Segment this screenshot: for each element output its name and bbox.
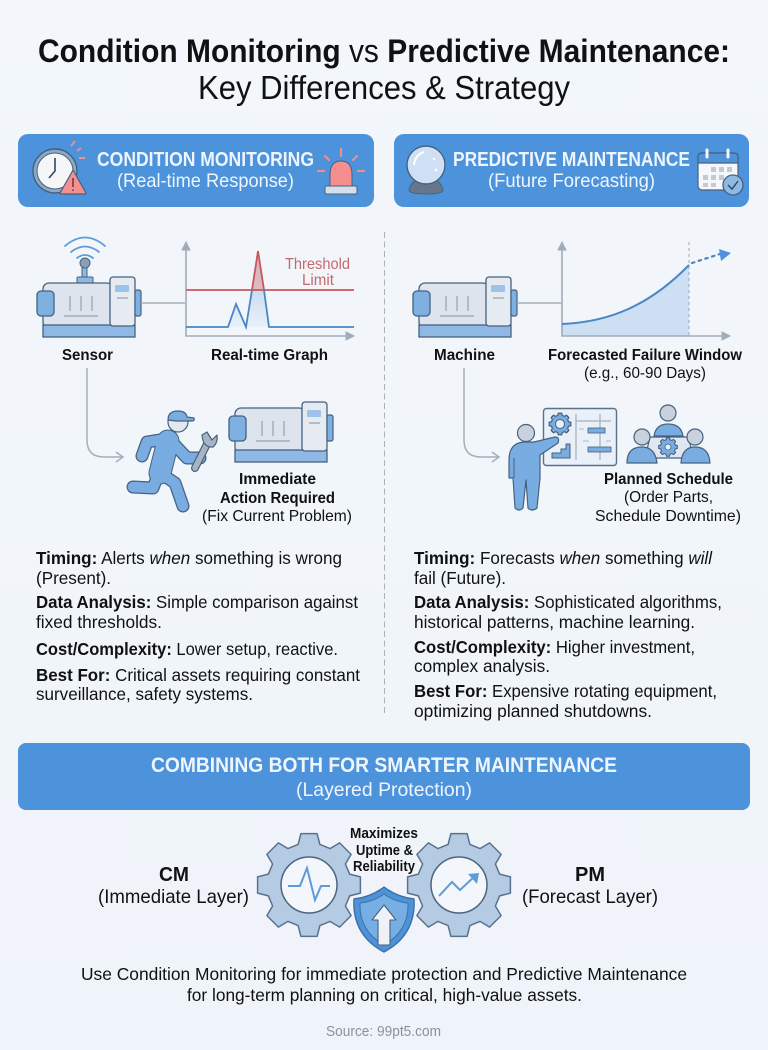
icon: machine — [413, 277, 517, 337]
heading: condition monitoring: CONDITION MONITORING — [97, 149, 314, 171]
text block: predictive maintenance details: fail (Future). — [414, 568, 506, 588]
divider — [384, 232, 386, 715]
icon: shield with arrow — [354, 887, 414, 952]
icon: planning board — [544, 408, 616, 466]
subheading: real-time response: (Real-time Response) — [117, 170, 294, 192]
text block: condition monitoring details: Cost/Complexity: Lower setup, reactive. — [36, 639, 338, 659]
icon: clock with warning — [33, 141, 86, 194]
label: machine: Machine — [434, 347, 495, 364]
connector — [141, 302, 185, 304]
label: forecasted failure window: (e.g., 60-90 Days) — [584, 365, 706, 382]
label: forecasted failure window: Forecasted Failure Window — [548, 347, 743, 364]
text block: condition monitoring details: Best For: Critical assets requiring constant — [36, 665, 360, 685]
text: planned schedule — [595, 471, 741, 525]
panel: condition monitoring header — [18, 134, 374, 207]
text block: condition monitoring details — [36, 548, 360, 704]
label: forecasted failure window — [548, 347, 743, 382]
text block: predictive maintenance details: Data Analysis: Sophisticated algorithms, — [414, 592, 722, 612]
source: Source: 99pt5.com — [326, 1024, 441, 1040]
label: predictive maintenance layer: PM — [575, 864, 605, 886]
text: maximizes uptime and reliability — [350, 826, 418, 875]
chart: forecast curve — [558, 242, 731, 340]
text: immediate action required — [202, 471, 352, 525]
icon: team meeting — [627, 405, 710, 463]
text block: condition monitoring details: Timing: Alerts when something is wrong — [36, 548, 342, 568]
title: Key Differences & Strategy — [198, 69, 570, 106]
panel: predictive maintenance header — [394, 134, 749, 207]
icon: machine being repaired — [229, 402, 333, 462]
title — [38, 33, 730, 106]
connector — [517, 302, 562, 304]
text block: predictive maintenance details: Timing: Forecasts when something will — [414, 548, 713, 568]
text block: condition monitoring details: (Present). — [36, 568, 111, 588]
label: condition monitoring layer: (Immediate Layer) — [98, 886, 249, 908]
icon: forecast gear — [408, 834, 510, 936]
label: sensor: Sensor — [62, 347, 113, 364]
text: conclusion — [81, 964, 687, 1005]
text: immediate action required: (Fix Current Problem) — [202, 508, 352, 525]
panel: predictive maintenance diagram — [413, 242, 743, 525]
chart: real-time graph — [182, 242, 354, 340]
text: conclusion: for long-term planning on critical, high-value assets. — [187, 985, 582, 1005]
text: planned schedule: (Order Parts, — [624, 489, 713, 506]
text: maximizes uptime and reliability: Uptime & — [356, 843, 413, 859]
heading: combining both: COMBINING BOTH FOR SMARTER MAINTENANCE — [151, 754, 617, 777]
text block: predictive maintenance details: optimizing planned shutdowns. — [414, 701, 652, 721]
text block: predictive maintenance details — [414, 548, 722, 721]
text block: condition monitoring details: Data Analysis: Simple comparison against — [36, 592, 358, 612]
icon: presenter — [509, 424, 559, 510]
text block: condition monitoring details: surveillance, safety systems. — [36, 684, 253, 704]
text block: condition monitoring details: fixed thresholds. — [36, 612, 162, 632]
label: condition monitoring layer — [98, 864, 249, 908]
text block: predictive maintenance details: complex analysis. — [414, 656, 550, 676]
icon: monitoring gear — [258, 834, 360, 936]
label: real-time graph: Real-time Graph — [211, 347, 328, 364]
icon: sensor machine — [37, 238, 141, 337]
panel: condition monitoring diagram — [37, 238, 354, 525]
text: maximizes uptime and reliability: Maximizes — [350, 826, 418, 842]
text: planned schedule: Planned Schedule — [604, 471, 733, 488]
panel: combining both banner — [18, 743, 750, 810]
label: condition monitoring layer: CM — [159, 864, 189, 886]
label: threshold limit: Threshold — [285, 256, 350, 273]
icon: crystal ball — [407, 146, 445, 194]
text: conclusion: Use Condition Monitoring for immediate protection and Predictive Maintenance — [81, 964, 687, 984]
arrow: sensor to action — [87, 368, 123, 462]
text: immediate action required: Action Required — [220, 490, 335, 507]
text block: predictive maintenance details: historical patterns, machine learning. — [414, 612, 695, 632]
text: maximizes uptime and reliability: Reliability — [353, 859, 415, 875]
label: threshold limit — [285, 256, 350, 289]
arrow: machine to schedule — [464, 368, 499, 462]
label: threshold limit: Limit — [302, 272, 335, 289]
subheading: layered protection: (Layered Protection) — [296, 779, 472, 801]
heading: predictive maintenance: PREDICTIVE MAINTENANCE — [453, 149, 690, 171]
subheading: future forecasting: (Future Forecasting) — [488, 170, 655, 192]
text: immediate action required: Immediate — [239, 471, 316, 488]
text block: predictive maintenance details: Best For: Expensive rotating equipment, — [414, 681, 717, 701]
text block: predictive maintenance details: Cost/Complexity: Higher investment, — [414, 637, 695, 657]
title: Condition Monitoring vs Predictive Maintenance: — [38, 33, 730, 69]
icon: running technician with wrench — [133, 411, 217, 506]
label: predictive maintenance layer — [522, 864, 658, 908]
label: predictive maintenance layer: (Forecast Layer) — [522, 886, 658, 908]
icon: alarm beacon — [318, 149, 364, 194]
text: planned schedule: Schedule Downtime) — [595, 508, 741, 525]
icon: calendar with check — [698, 150, 743, 195]
